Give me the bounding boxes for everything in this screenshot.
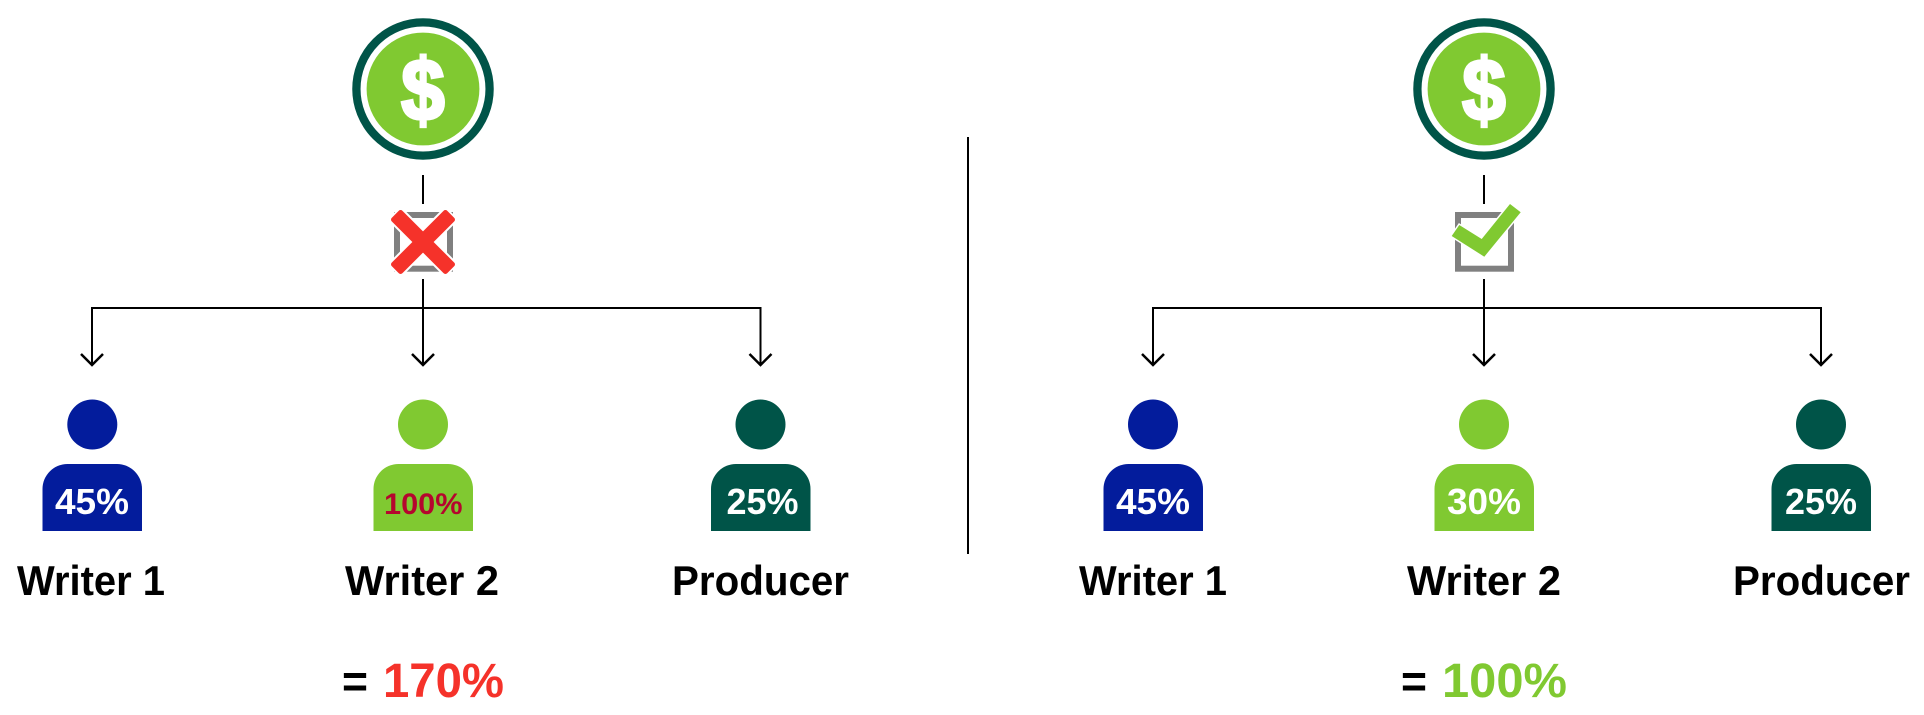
person: writer 2: Writer 2: [345, 557, 499, 604]
person: producer: Producer: [1733, 557, 1910, 604]
person: writer 1: 45%: [1116, 481, 1190, 522]
icon: dollar coin: [1417, 22, 1551, 156]
person: writer 2: 100%: [384, 488, 462, 521]
arrows: payout tree: [81, 279, 772, 365]
person: producer: [1733, 400, 1910, 604]
total: 100%: 100%: [1442, 655, 1567, 708]
arrows: payout tree: [1142, 279, 1832, 365]
panel: correct split: [1079, 22, 1910, 708]
person: writer 1: 45%: [55, 481, 129, 522]
total: 170%: =: [342, 655, 368, 707]
person: writer 2: [1407, 400, 1561, 604]
total: 170%: 170%: [383, 655, 504, 708]
connector: coin to check: [1483, 175, 1485, 204]
person: producer: Producer: [672, 557, 849, 604]
icon: dollar coin: $: [1462, 41, 1506, 139]
person: writer 1: Writer 1: [1079, 557, 1227, 604]
person: writer 2: [345, 400, 499, 604]
person: writer 1: [1079, 400, 1227, 604]
person: writer 1: [17, 400, 165, 604]
icon: dollar coin: $: [401, 41, 445, 139]
icon: dollar coin: [356, 22, 490, 156]
total: 100%: =: [1401, 655, 1427, 707]
icon: checkbox with green check: [1452, 204, 1521, 269]
icon: checkbox with red cross: [365, 184, 481, 300]
person: writer 2: 30%: [1447, 481, 1521, 522]
person: writer 1: Writer 1: [17, 557, 165, 604]
divider: [967, 137, 969, 554]
panel: incorrect split: [17, 22, 849, 708]
person: producer: 25%: [1785, 481, 1857, 522]
person: producer: [672, 400, 849, 604]
person: writer 2: Writer 2: [1407, 557, 1561, 604]
person: producer: 25%: [726, 481, 798, 522]
connector: coin to cross: [422, 175, 424, 204]
